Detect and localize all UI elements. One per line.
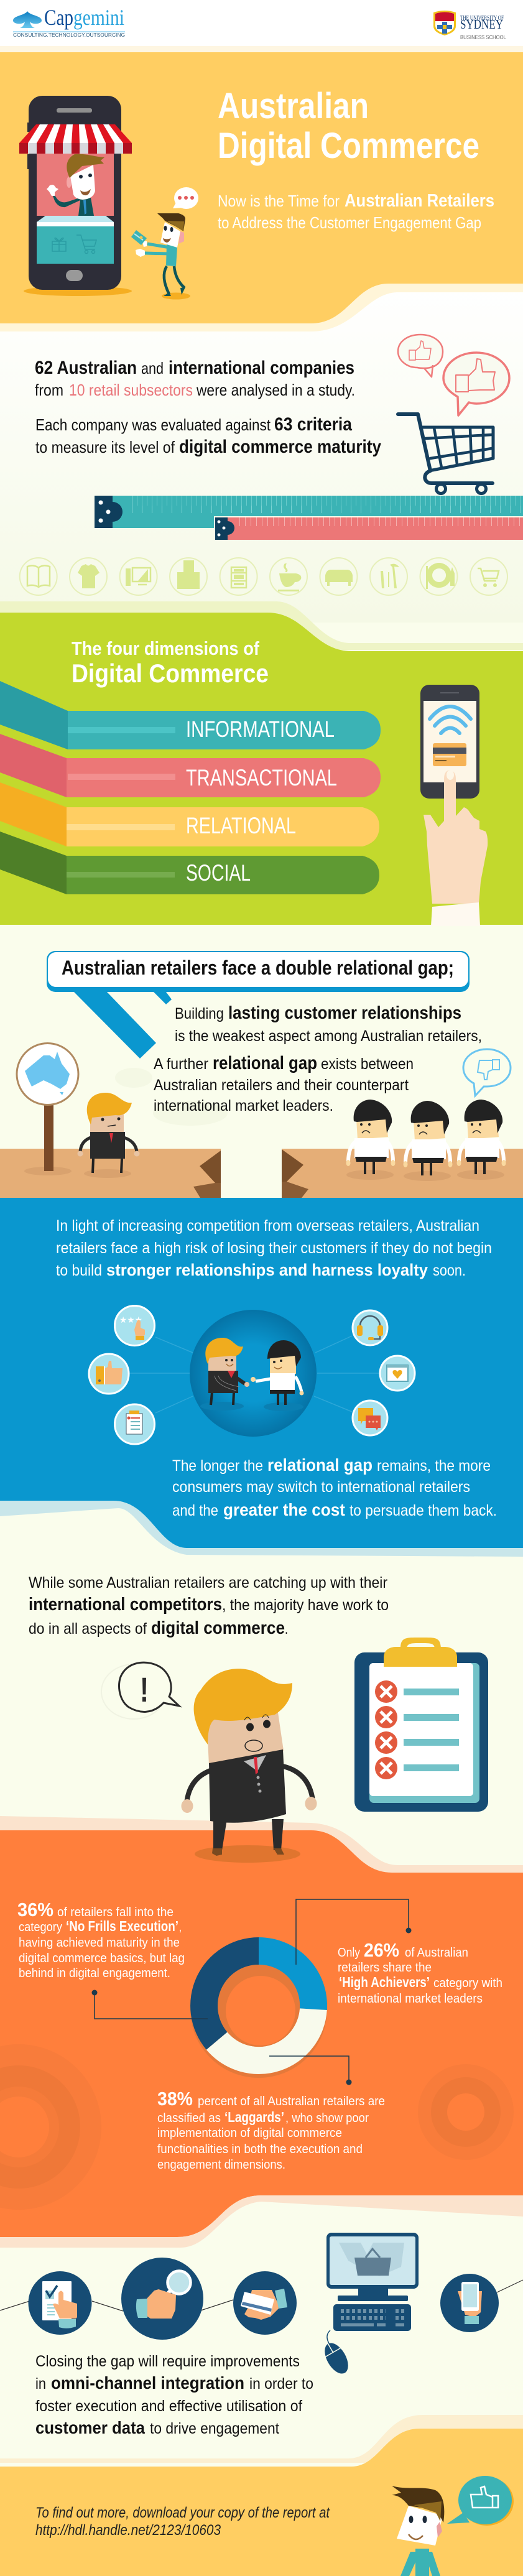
text block: 38 percent laggards: implementation of digital commerce: [157, 2126, 342, 2140]
subtitle: to Address the Customer Engagement Gap: [218, 213, 481, 232]
subtitle: Australian Retailers: [345, 191, 494, 211]
text block: weakest aspect: is the weakest aspect among Australian retailers,: [175, 1027, 482, 1045]
text block: study scope: [35, 358, 381, 457]
text block: 36 percent no frills: ,: [179, 1920, 182, 1934]
text block: 36 percent no frills: 36%: [17, 1899, 53, 1920]
small bubble: [398, 335, 443, 377]
bar: transactional: [0, 734, 381, 797]
text block: catching up: international competitors: [29, 1595, 222, 1615]
text block: relational gap: [154, 1053, 414, 1114]
panel: hero: [0, 52, 523, 331]
text block: closing the gap: to drive engagement: [150, 2420, 279, 2437]
text block: competition: retailers face a high risk of losing their customers if they do not begin: [56, 1239, 492, 1257]
panel: maturity categories: [0, 1816, 523, 2248]
text block: catching up: , the majority have work to: [222, 1596, 389, 1614]
text block: catching up: [29, 1574, 389, 1638]
text block: study scope: 63 criteria: [274, 414, 352, 435]
text block: 38 percent laggards: functionalities in both the execution and: [157, 2143, 363, 2156]
icons: ten retail subsectors: [20, 558, 507, 595]
text block: study scope: 10 retail subsectors: [69, 381, 193, 399]
text block: catching up: digital commerce: [151, 1618, 285, 1638]
subtitle: [218, 191, 494, 232]
icon: shopping cart: [398, 414, 493, 494]
text block: 38 percent laggards: engagement dimensions.: [157, 2158, 285, 2172]
text block: study scope: Each company was evaluated against: [35, 415, 271, 434]
text block: closing the gap: foster execution and effective utilisation of: [35, 2398, 302, 2415]
text block: relational gap: Australian retailers and their counterpart: [154, 1077, 409, 1094]
icon: card in hand: [233, 2271, 297, 2335]
panel: footer: [0, 2415, 523, 2576]
icon: exclamation bubble: !: [140, 1670, 149, 1709]
text block: 38 percent laggards: classified as: [157, 2111, 221, 2125]
heading: [72, 637, 269, 688]
bar: social: SOCIAL: [186, 860, 251, 886]
text block: cost of the gap: and the: [172, 1502, 218, 1519]
text block: 26 percent high achievers: [338, 1939, 502, 2006]
text block: 38 percent laggards: [157, 2088, 385, 2172]
text block: closing the gap: in order to: [249, 2375, 313, 2393]
title: Australian: [218, 86, 369, 126]
figure: surprised retailer: [182, 1669, 317, 1863]
decorative circles: [0, 2044, 514, 2210]
icon: magnifier: [121, 2258, 203, 2340]
icon: thumbs-up bubbles: [398, 335, 509, 415]
heading: Digital Commerce: [72, 659, 269, 688]
text block: 26 percent high achievers: retailers share the: [338, 1961, 432, 1975]
icon: checklist tap: [29, 2271, 92, 2335]
bar: informational: [0, 681, 381, 749]
text block: competition: In light of increasing competition from overseas retailers, Australian: [56, 1217, 479, 1235]
text block: study scope: to measure its level of: [35, 438, 175, 456]
icon: thumbs-down bubble: [463, 1049, 511, 1096]
text block: study scope: 62 Australian: [35, 358, 137, 378]
text block: relational gap: exists between: [321, 1055, 414, 1073]
text block: 36 percent no frills: of retailers fall into the: [57, 1906, 174, 1919]
shopkeeper: [47, 154, 104, 216]
awning: [19, 124, 132, 154]
icon: checklist: [114, 1404, 154, 1444]
icon: mouse: [320, 2339, 353, 2378]
text block: relational gap: international market leaders.: [154, 1097, 333, 1114]
logo: University of Sydney: SYDNEY: [460, 17, 503, 32]
text block: competition: to build: [56, 1262, 102, 1279]
icons: omni-channel steps: [0, 2233, 523, 2378]
icon: customer with credit card: [131, 187, 198, 300]
text block: closing the gap: customer data: [35, 2418, 145, 2437]
logo: University of Sydney: [433, 11, 506, 40]
text block: 36 percent no frills: digital commerce basics, but lag: [19, 1952, 185, 1965]
text block: competition: [56, 1217, 492, 1279]
customer one: [346, 1100, 396, 1180]
icon: star rating: [114, 1306, 154, 1346]
figure: happy customer: [392, 2486, 444, 2576]
text block: cost of the gap: The longer the: [172, 1457, 263, 1475]
text block: weakest aspect: lasting customer relationships: [228, 1003, 461, 1023]
callout sign: Australian retailers face a double relational gap;: [62, 957, 454, 979]
bar: informational: INFORMATIONAL: [186, 716, 335, 742]
text block: cost of the gap: consumers may switch to international retailers: [172, 1478, 470, 1496]
text block: 36 percent no frills: ‘No Frills Execution’: [66, 1918, 178, 1934]
customer two: [403, 1101, 453, 1181]
logo: University of Sydney: BUSINESS SCHOOL: [460, 34, 506, 40]
speech bubble: [173, 187, 198, 209]
figure: Australian retailer: [77, 1093, 139, 1178]
ground with crack: [0, 1068, 523, 1198]
text block: closing the gap: [35, 2353, 313, 2437]
subtitle: Now is the Time for: [218, 192, 340, 210]
text block: report link: To find out more, download your copy of the report at: [35, 2504, 330, 2521]
text block: 36 percent no frills: having achieved maturity in the: [19, 1936, 180, 1950]
chart: measuring tapes: [95, 496, 523, 540]
icon: browser heart: [380, 1356, 415, 1391]
text block: relational gap: relational gap: [213, 1053, 317, 1073]
callout sign: [47, 951, 470, 1059]
logo: University of Sydney: THE UNIVERSITY OF: [460, 15, 504, 22]
text block: closing the gap: in: [35, 2375, 46, 2393]
text block: 26 percent high achievers: of Australian: [405, 1946, 468, 1960]
text block: 36 percent no frills: behind in digital engagement.: [19, 1967, 170, 1980]
customer three: [456, 1100, 506, 1180]
text block: 38 percent laggards: percent of all Australian retailers are: [198, 2095, 385, 2108]
text block: report link: [35, 2504, 330, 2539]
logo: Capgemini: [13, 5, 125, 38]
text block: relational gap: A further: [154, 1055, 208, 1073]
text block: weakest aspect: [175, 1003, 482, 1045]
text block: 36 percent no frills: category: [19, 1920, 62, 1934]
leader lines: [92, 1899, 412, 2085]
text block: 38 percent laggards: ‘Laggards’: [224, 2109, 284, 2125]
bar: social: [0, 832, 379, 894]
text block: study scope: were analysed in a study.: [196, 381, 355, 399]
text block: 26 percent high achievers: ‘High Achievers’: [339, 1974, 430, 1990]
text block: closing the gap: Closing the gap will require improvements: [35, 2353, 300, 2370]
bar: relational: RELATIONAL: [186, 813, 296, 838]
text block: 38 percent laggards: 38%: [157, 2088, 193, 2110]
text block: 26 percent high achievers: international market leaders: [338, 1992, 483, 2006]
text block: 26 percent high achievers: 26%: [364, 1939, 399, 1961]
text block: competition: soon.: [433, 1262, 466, 1279]
title: [218, 86, 479, 166]
text block: cost of the gap: to persuade them back.: [349, 1502, 497, 1519]
logo: Capgemini: gemini: [73, 5, 124, 30]
text block: weakest aspect: Building: [175, 1005, 224, 1022]
text block: 26 percent high achievers: category with: [433, 1976, 502, 1990]
large bubble: [443, 353, 509, 415]
text block: study scope: digital commerce maturity: [179, 437, 381, 457]
title: Digital Commerce: [218, 126, 479, 166]
bar: transactional: TRANSACTIONAL: [186, 765, 337, 790]
icon: exclamation bubble: [101, 1662, 179, 1719]
text block: cost of the gap: remains, the more: [377, 1457, 491, 1475]
text block: 38 percent laggards: , who show poor: [285, 2111, 369, 2125]
figures: three unhappy customers: [346, 1100, 506, 1181]
text block: closing the gap: omni-channel integration: [51, 2373, 244, 2393]
text block: study scope: and: [141, 359, 164, 378]
icon: phone in hand: [440, 2274, 499, 2332]
text block: study scope: from: [35, 381, 63, 399]
logo: Capgemini: Cap: [44, 5, 73, 30]
chart: donut: [190, 1937, 327, 2078]
bar: relational: [0, 782, 379, 846]
icon: thumbs-up bubble: [447, 2476, 514, 2526]
figures: handshake: [200, 1338, 303, 1411]
text block: cost of the gap: greater the cost: [223, 1500, 345, 1519]
text block: competition: stronger relationships and harness loyalty: [106, 1261, 428, 1279]
text block: catching up: do in all aspects of: [29, 1620, 147, 1638]
icon: smartphone storefront: [19, 96, 132, 296]
icon: chat bubbles: [353, 1401, 387, 1435]
text block: cost of the gap: [172, 1455, 497, 1519]
text block: 36 percent no frills: [17, 1899, 185, 1980]
text block: 26 percent high achievers: Only: [338, 1946, 360, 1960]
icon: star rating: ★★★: [119, 1315, 142, 1325]
icon: thumbs up: [89, 1354, 129, 1394]
icon: headset: [353, 1310, 387, 1345]
icon: clipboard of failed criteria: [354, 1638, 488, 1812]
panel: four dimensions: [0, 601, 523, 926]
panel: loyalty risk: [0, 1198, 523, 1557]
text block: catching up: While some Australian retailers are catching up with their: [29, 1574, 387, 1591]
text block: catching up: .: [285, 1620, 288, 1638]
icon: phone payment with hand: [420, 685, 488, 926]
panel: double relational gap: [0, 951, 523, 1198]
text block: cost of the gap: relational gap: [267, 1455, 373, 1475]
heading: The four dimensions of: [72, 637, 260, 659]
logo: Capgemini: CONSULTING.TECHNOLOGY.OUTSOURCING: [13, 32, 125, 38]
icon: Australia signpost: [17, 1044, 78, 1175]
icon: desktop computer: [320, 2233, 419, 2378]
text block: study scope: international companies: [169, 358, 354, 378]
text block: report link: http://hdl.handle.net/2123/10603: [35, 2522, 221, 2539]
diagram: connected relationship icons: [89, 1306, 415, 1444]
